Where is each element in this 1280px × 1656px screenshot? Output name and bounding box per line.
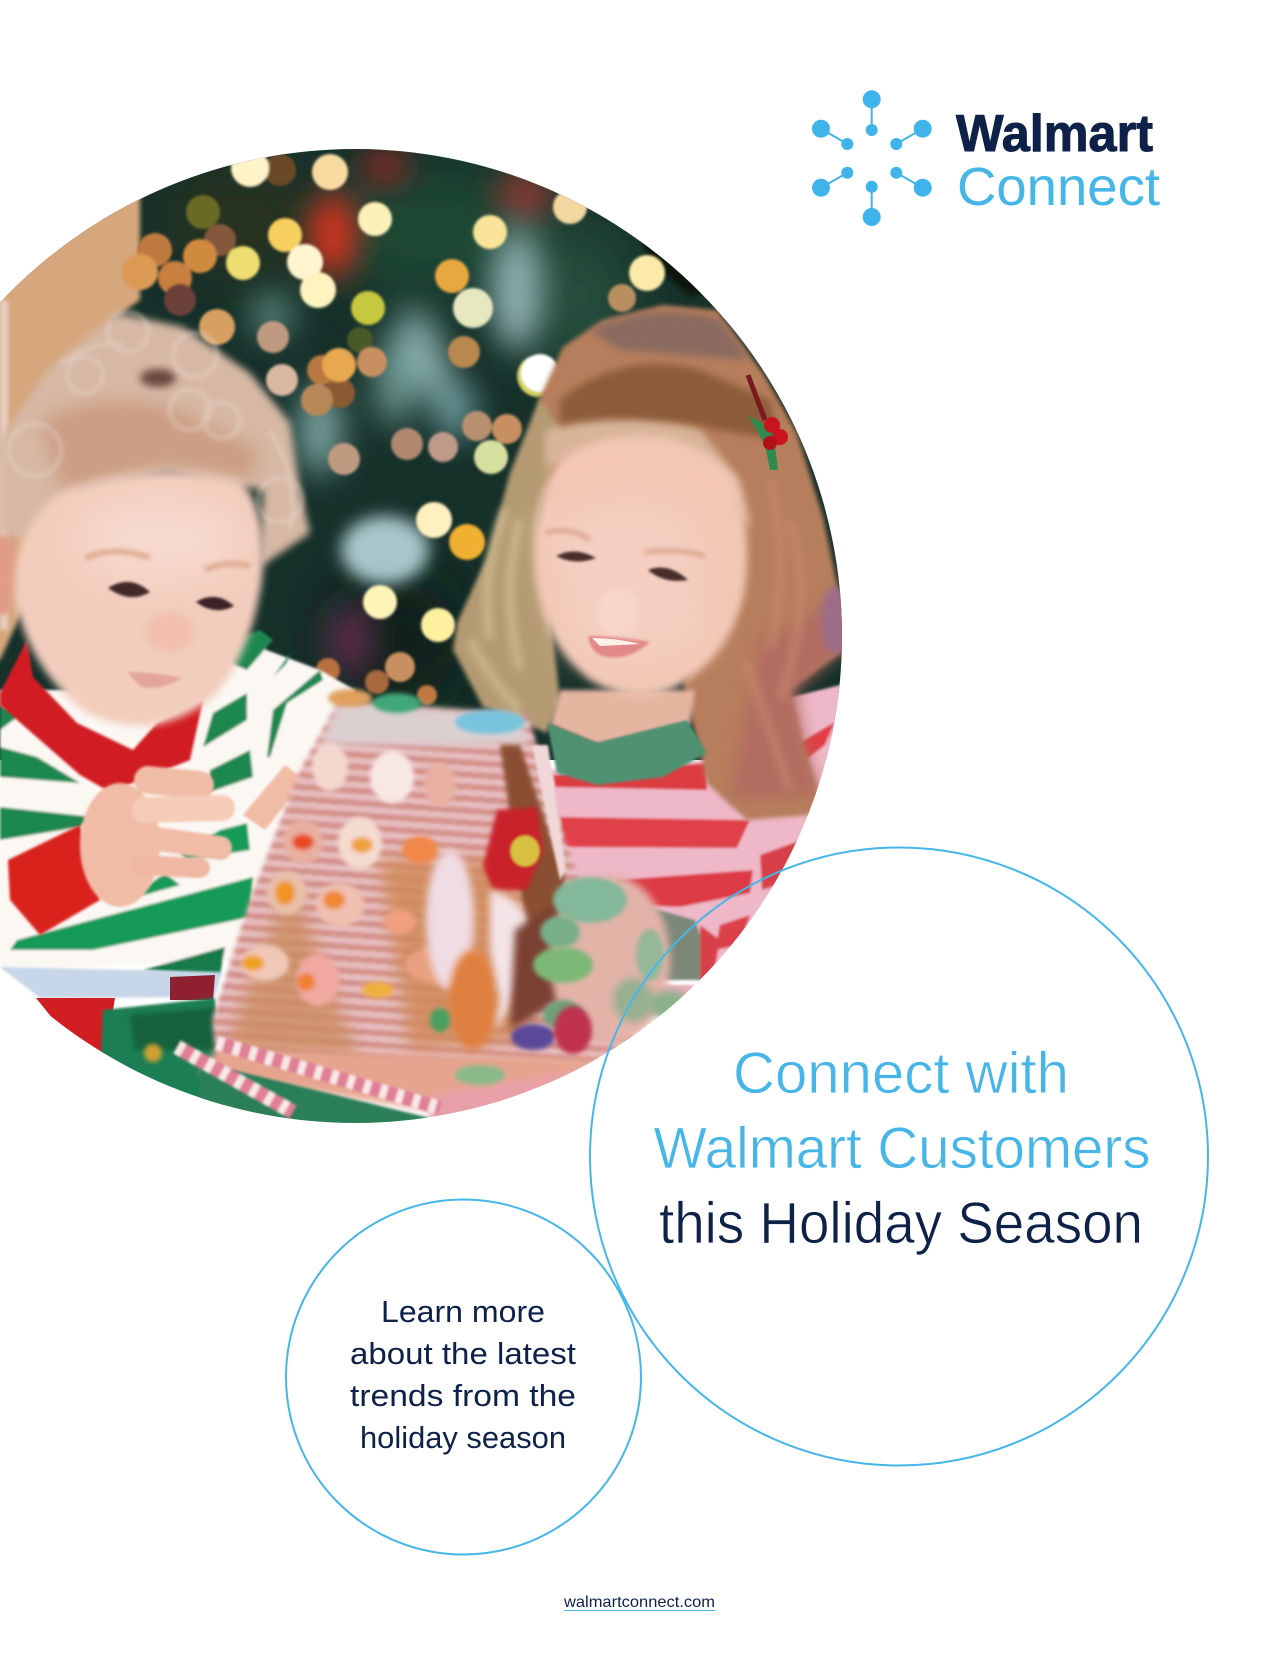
photo: bokeh lights	[122, 149, 665, 705]
photo background: Christmas tree	[0, 140, 860, 760]
footer link: walmartconnect.com	[563, 1594, 715, 1611]
circle outline: learn more circle	[286, 1200, 641, 1554]
boy shirt	[0, 630, 355, 975]
text block: learn more: holiday season	[360, 1420, 566, 1455]
icon: spark network	[812, 90, 932, 226]
circle outline: headline circle	[590, 848, 1208, 1466]
photo: girl's striped shirt	[550, 683, 840, 1016]
photo: children decorating a gingerbread house	[0, 140, 860, 1135]
logo word: Walmart: Walmart	[956, 105, 1153, 163]
shelf and table items	[0, 967, 222, 998]
photo: girl	[453, 305, 849, 820]
boy cuff	[8, 825, 100, 935]
boy hair	[0, 313, 310, 567]
boy collar	[0, 640, 203, 792]
photo: candy canes	[177, 1043, 440, 1112]
photo: gingerbread house	[200, 689, 650, 1135]
heading: Connect with Walmart Customers this Holiday Season: this Holiday Season	[659, 1191, 1143, 1256]
photo: boy	[0, 312, 355, 1130]
boy hand	[80, 765, 305, 907]
hair clip	[748, 375, 788, 470]
heading: Connect with Walmart Customers this Holiday Season: Walmart Customers	[654, 1116, 1150, 1181]
text block: learn more: trends from the	[350, 1378, 576, 1413]
logo: Walmart Connect	[812, 90, 1160, 226]
heading: Connect with Walmart Customers this Holiday Season	[654, 1041, 1150, 1256]
heading: Connect with Walmart Customers this Holiday Season: Connect with	[733, 1041, 1069, 1106]
text block: learn more: about the latest	[350, 1336, 576, 1371]
text block: learn more: Learn more	[381, 1294, 545, 1329]
boy ear	[0, 533, 14, 617]
text block: learn more	[350, 1294, 576, 1455]
photo: green candy bush	[430, 875, 692, 1085]
boy face	[15, 472, 263, 726]
logo word: Connect: Connect	[957, 157, 1160, 217]
